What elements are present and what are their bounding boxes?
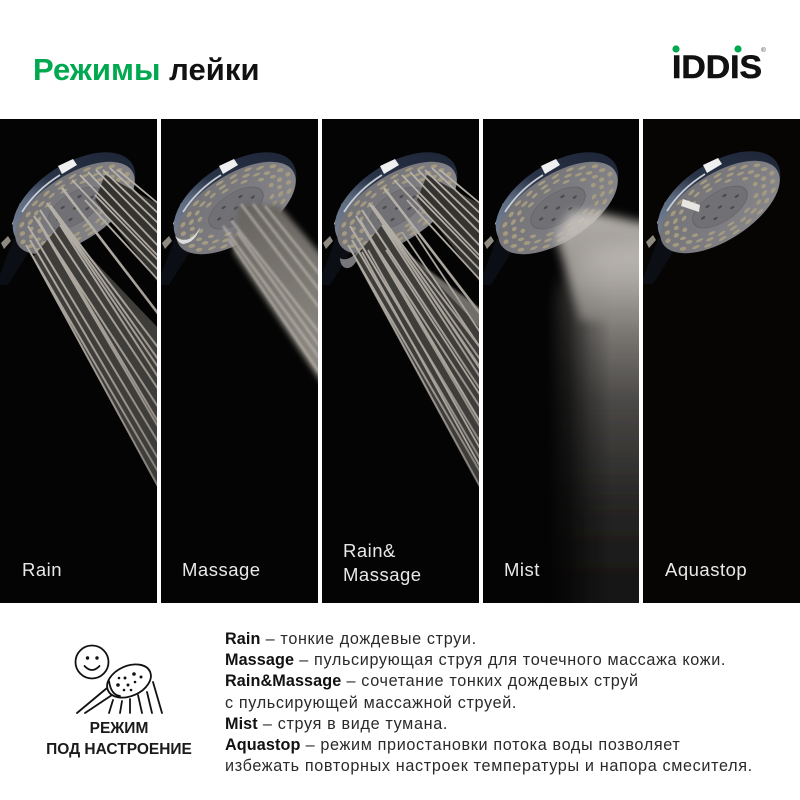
water: combined jets [348,168,482,490]
caption: Rain&Massage: Massage [343,564,422,585]
label: mood mode text: ПОД НАСТРОЕНИЕ [46,740,192,758]
icon and label: mood mode [46,644,192,758]
text block: mode descriptions: Massage – пульсирующая струя для точечного массажа кожи. [225,651,726,669]
text block: mode descriptions: Rain – тонкие дождевые струи. [225,630,477,648]
text block: mode descriptions: Rain&Massage – сочетание тонких дождевых струй [225,672,639,690]
label: mood mode text [46,720,192,758]
slider: massage position [175,227,200,244]
caption: Massage: Massage [182,559,261,580]
water: rain jets [26,168,160,490]
icon: smiley and hand shower [74,644,163,714]
caption: Aquastop: Aquastop [665,559,747,580]
slider: aquastop position [681,199,700,212]
caption: Mist: Mist [504,559,540,580]
caption: Rain&Massage: Rain& [343,540,396,561]
text block: mode descriptions: Mist – струя в виде тумана. [225,715,448,733]
panel: Aquastop [643,119,800,603]
text block: mode descriptions: Aquastop – режим приостановки потока воды позволяет [225,736,680,754]
text block: mode descriptions: с пульсирующей массажной струей. [225,694,517,712]
slider: rain and massage position [340,250,360,268]
panel: Rain [0,119,157,603]
panel: Massage [161,119,318,603]
text block: mode descriptions [225,630,753,775]
logo: IDDIS: ® [761,46,766,54]
title: Режимы лейки [33,52,260,87]
water: massage stream [223,204,323,385]
panel: Rain&Massage [322,119,479,603]
text block: mode descriptions: избежать повторных настроек температуры и напора смесителя. [225,757,753,775]
label: mood mode text: РЕЖИМ [90,720,148,737]
water: mist plume [552,206,639,603]
caption: Rain: Rain [22,559,62,580]
panel: Mist [483,119,639,603]
